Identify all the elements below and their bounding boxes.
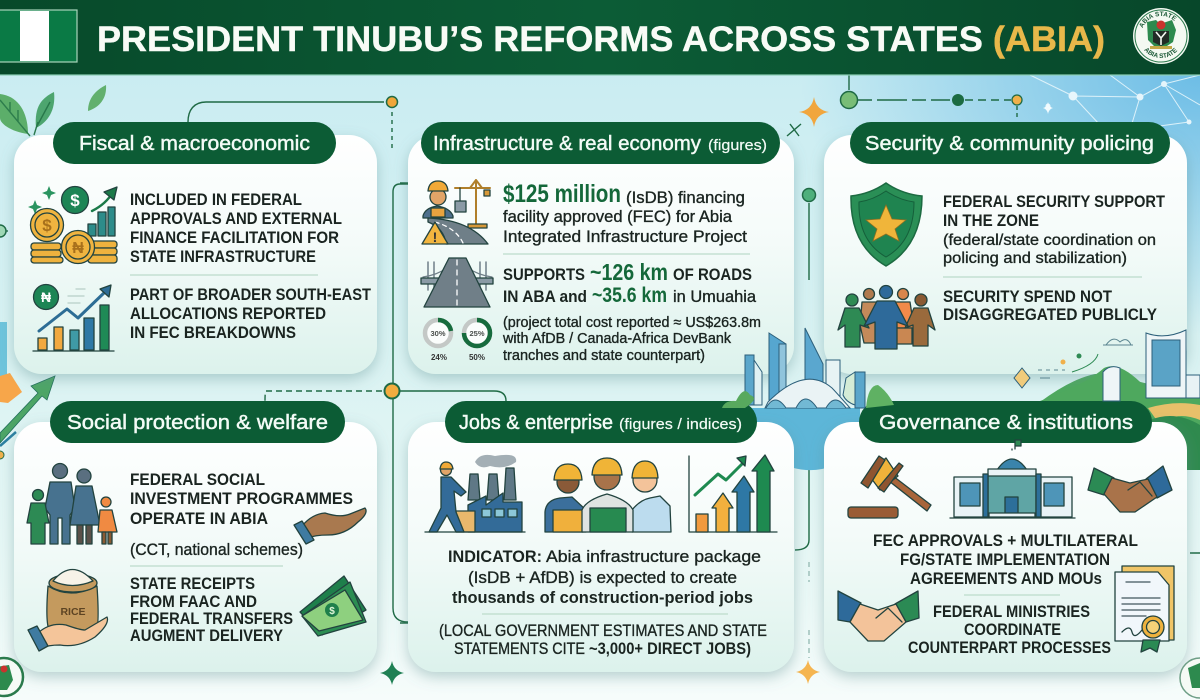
panel: Fiscal & macroeconomic <box>14 122 377 374</box>
text: FEC approvals <box>873 532 1138 588</box>
text: south-east allocations <box>130 286 371 342</box>
icon: shield with star <box>851 183 922 266</box>
icon: certificate <box>1115 566 1174 652</box>
icon: community group <box>838 286 935 349</box>
heading pill: Infrastructure & real economy <box>433 133 701 155</box>
connector nodes and sparkles <box>0 92 1053 685</box>
text: security spend: SECURITY SPEND NOT <box>943 288 1112 306</box>
heading pill: (figures / indices) <box>619 416 742 433</box>
icon: worker, crane and road: ! <box>433 229 437 245</box>
text: project total cost <box>502 315 761 364</box>
panel: Governance & institutions <box>824 401 1187 672</box>
panel: Infrastructure & real economy <box>408 122 794 374</box>
left decoration: bars, cube and arrow <box>0 322 55 446</box>
chart: donut 30% / 24%: 30% <box>430 329 446 338</box>
icon: three workers <box>545 458 671 532</box>
panel: Social protection & welfare <box>14 401 377 672</box>
icon: seal bottom right <box>1180 658 1200 698</box>
heading pill <box>50 401 345 443</box>
text: south-east allocations: IN FEC BREAKDOWNS <box>130 324 296 342</box>
text: social investment: (CCT, national schemes) <box>130 541 303 559</box>
icon: banknotes: $ <box>329 606 335 617</box>
icon: government building <box>950 440 1075 518</box>
icon: coins and growth: ₦ <box>72 240 84 257</box>
heading pill <box>445 401 757 443</box>
text: federal approvals <box>130 191 342 266</box>
text: project total cost: (project total cost reported ≈ US$263.8m <box>503 315 761 331</box>
text: state receipts <box>130 575 293 645</box>
text: federal security support: IN THE ZONE <box>943 212 1039 230</box>
panel: Security & community policing <box>824 122 1187 374</box>
icon: rice sack in hand <box>28 570 108 651</box>
text: road kilometres: in Umuahia <box>673 288 757 306</box>
text: federal approvals: INCLUDED IN FEDERAL <box>130 191 302 209</box>
text: state receipts: STATE RECEIPTS <box>130 575 255 593</box>
icon: handshake top <box>1088 466 1172 512</box>
decoration: leaves <box>0 85 106 136</box>
text: federal security support: FEDERAL SECURITY SUPPORT <box>943 193 1165 211</box>
text: federal ministries: COUNTERPART PROCESSES <box>908 639 1111 657</box>
text: south-east allocations: PART OF BROADER SOUTH-EAST <box>130 286 371 304</box>
text: direct jobs: STATEMENTS CITE <box>454 640 585 658</box>
icon: worker and factory <box>425 455 525 532</box>
icon: handshake bottom <box>838 591 919 641</box>
text: direct jobs: ~3,000+ DIRECT JOBS) <box>589 640 751 658</box>
text: indicator: Abia infrastructure package <box>546 547 761 566</box>
heading pill: Social protection & welfare <box>67 412 328 434</box>
illustration: right hill, tower and cloud <box>1014 330 1200 401</box>
text: security spend <box>943 288 1157 324</box>
text: direct jobs: (LOCAL GOVERNMENT ESTIMATES AND STATE <box>439 622 767 640</box>
text: federal security support: (federal/state coordination on <box>943 232 1156 249</box>
heading pill: Governance & institutions <box>879 412 1133 434</box>
text: FEC approvals: FG/STATE IMPLEMENTATION <box>900 551 1110 569</box>
chart: donut 30% / 24% <box>425 320 451 362</box>
text: federal security support: policing and stabilization) <box>943 250 1127 267</box>
text: indicator: thousands of construction-period jobs <box>452 588 753 607</box>
text: road kilometres <box>503 259 757 307</box>
text: indicator: INDICATOR: <box>448 547 542 566</box>
text: indicator <box>448 547 761 607</box>
icon: growth arrows <box>689 455 777 532</box>
text: state receipts: FROM FAAC AND <box>130 593 257 611</box>
icon: banknotes <box>300 576 366 636</box>
text: $125 million: $125 million <box>503 180 621 208</box>
icon: gavel <box>848 456 931 518</box>
text: road kilometres: ~35.6 km <box>592 284 667 307</box>
icon: Nigerian flag <box>0 10 77 62</box>
text: state receipts: FEDERAL TRANSFERS <box>130 610 293 628</box>
heading pill: Fiscal & macroeconomic <box>79 133 310 155</box>
text: state receipts: AUGMENT DELIVERY <box>130 627 283 645</box>
text: FEC approvals: FEC APPROVALS + MULTILATERAL <box>873 532 1138 550</box>
icon: Abia State seal <box>1133 8 1189 64</box>
header bar <box>0 0 1200 76</box>
icon: family <box>27 464 117 544</box>
hills <box>1040 373 1200 470</box>
text: direct jobs <box>439 622 767 658</box>
chart: donut 25% / 50%: 25% <box>469 329 485 338</box>
text: road kilometres: OF ROADS <box>673 266 752 284</box>
heading pill <box>850 122 1170 164</box>
heading pill <box>421 122 780 164</box>
panel: Jobs & enterprise <box>408 401 794 672</box>
text: social investment: INVESTMENT PROGRAMMES <box>130 490 353 508</box>
icon: rice sack in hand: RICE <box>60 606 86 618</box>
text: FEC approvals: AGREEMENTS AND MOUs <box>910 570 1102 588</box>
chart: donut 25% / 50%: 50% <box>469 353 485 362</box>
title: PRESIDENT TINUBU’S REFORMS ACROSS STATES (ABIA) <box>97 20 1105 59</box>
icon: Abia State seal: ABIA STATE <box>1140 12 1177 28</box>
icon: coins and growth: $ <box>70 191 80 210</box>
heading pill: Security & community policing <box>865 133 1154 155</box>
text: federal ministries <box>908 603 1111 657</box>
heading pill: Jobs & enterprise <box>459 412 613 434</box>
text: project total cost: tranches and state counterpart) <box>503 348 705 364</box>
icon: highway and bridge <box>421 258 493 307</box>
icon: worker, crane and road <box>422 180 490 245</box>
river <box>745 408 860 470</box>
heading pill <box>53 122 336 164</box>
chart: donut 30% / 24%: 24% <box>431 353 447 362</box>
text: project total cost: with AfDB / Canada-Africa DevBank <box>502 331 732 347</box>
text: federal ministries: COORDINATE <box>964 621 1061 639</box>
text: $125 million: facility approved (FEC) for Abia <box>503 208 733 226</box>
heading pill <box>859 401 1152 443</box>
text: federal approvals: STATE INFRASTRUCTURE <box>130 248 316 266</box>
decoration: network constellation <box>1030 75 1200 130</box>
text: road kilometres: ~126 km <box>590 259 668 285</box>
icon: Abia State seal: ABIA STATE <box>1144 48 1178 58</box>
heading pill: (figures) <box>708 137 767 154</box>
text: $125 million: Integrated Infrastructure Project <box>503 228 747 246</box>
text: road kilometres: IN ABA and <box>503 288 587 306</box>
text: $125 million <box>503 180 747 246</box>
text: federal approvals: APPROVALS AND EXTERNAL <box>130 210 342 228</box>
icon: coins and growth <box>28 186 117 264</box>
text: federal security support <box>943 193 1165 267</box>
icon: bar chart with arrow: ₦ <box>41 289 51 305</box>
text: $125 million: (IsDB) financing <box>626 189 745 207</box>
text: road kilometres: SUPPORTS <box>503 266 585 284</box>
chart: donut 25% / 50% <box>464 320 490 362</box>
icon: seal bottom left <box>0 658 23 696</box>
text: social investment: OPERATE IN ABIA <box>130 510 268 528</box>
icon: bar chart with arrow <box>33 284 114 351</box>
text: security spend: DISAGGREGATED PUBLICLY <box>943 306 1157 324</box>
text: south-east allocations: ALLOCATIONS REPORTED <box>130 305 326 323</box>
icon: open hand <box>294 508 366 544</box>
illustration: central skyline <box>722 328 894 408</box>
text: social investment <box>130 471 353 559</box>
text: federal approvals: FINANCE FACILITATION FOR <box>130 229 339 247</box>
text: federal ministries: FEDERAL MINISTRIES <box>933 603 1090 621</box>
text: social investment: FEDERAL SOCIAL <box>130 471 265 489</box>
icon: coins and growth: $ <box>42 216 52 235</box>
text: indicator: (IsDB + AfDB) is expected to create <box>468 568 737 587</box>
